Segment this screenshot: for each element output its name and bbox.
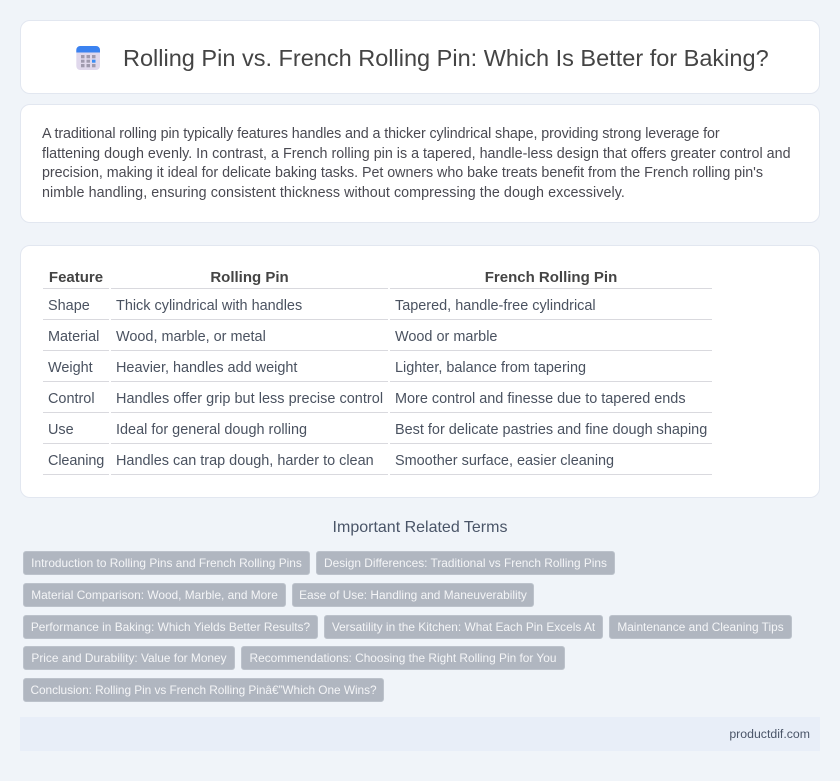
row: material <box>48 329 497 345</box>
table header <box>49 269 617 286</box>
table header: French Rolling Pin <box>485 269 617 286</box>
row: shape: Thick cylindrical with handles <box>116 298 302 314</box>
panel: introduction <box>20 104 820 223</box>
row: control: Handles offer grip but less precise control <box>116 391 383 407</box>
row: material: Wood or marble <box>395 329 497 345</box>
row: use: Best for delicate pastries and fine dough shaping <box>395 422 707 438</box>
related term tags: Recommendations: Choosing the Right Rolling Pin for You <box>250 651 556 665</box>
related term tags: Ease of Use: Handling and Maneuverability <box>299 588 527 602</box>
row: cleaning: Smoother surface, easier cleaning <box>395 453 614 469</box>
related term tags: Maintenance and Cleaning Tips <box>617 620 784 634</box>
row: use <box>48 422 707 438</box>
table header: Feature <box>49 269 103 286</box>
row: weight <box>48 360 586 376</box>
intro text: precision, making it ideal for delicate baking tasks. Pet owners who bake treats benefit from the French rolling pin's <box>42 165 763 181</box>
row: control: More control and finesse due to tapered ends <box>395 391 686 407</box>
related term tags <box>23 551 792 702</box>
row: weight: Lighter, balance from tapering <box>395 360 586 376</box>
footer source link: productdif.com <box>729 727 810 741</box>
intro text <box>42 126 791 201</box>
related term tags: Conclusion: Rolling Pin vs French Rolling Pinâ€”Which One Wins? <box>30 683 377 697</box>
row: control <box>48 391 686 407</box>
row: shape: Tapered, handle-free cylindrical <box>395 298 596 314</box>
row: material: Wood, marble, or metal <box>116 329 266 345</box>
row: cleaning: Cleaning <box>48 453 104 469</box>
row: weight: Weight <box>48 360 93 376</box>
intro text: flattening dough evenly. In contrast, a French rolling pin is a tapered, handle-less design that offers greater control and <box>42 146 791 162</box>
related term tags: Price and Durability: Value for Money <box>31 651 227 665</box>
row: control: Control <box>48 391 95 407</box>
row: cleaning: Handles can trap dough, harder to clean <box>116 453 374 469</box>
related term tags: Design Differences: Traditional vs French Rolling Pins <box>324 556 607 570</box>
intro text: A traditional rolling pin typically features handles and a thicker cylindrical shape, providing strong leverage for <box>42 126 720 142</box>
related term tags: Material Comparison: Wood, Marble, and More <box>31 588 278 602</box>
related term tags: Performance in Baking: Which Yields Better Results? <box>31 620 310 634</box>
table header: Rolling Pin <box>210 269 289 286</box>
row: shape <box>48 298 596 314</box>
panel: comparison table <box>20 245 820 498</box>
related term tags: Versatility in the Kitchen: What Each Pin Excels At <box>332 620 595 634</box>
heading: related terms: Important Related Terms <box>333 519 507 536</box>
row: material: Material <box>48 329 99 345</box>
icon: calendar <box>76 46 100 70</box>
row: weight: Heavier, handles add weight <box>116 360 297 376</box>
footer <box>20 717 820 751</box>
row: shape: Shape <box>48 298 90 314</box>
row: use: Ideal for general dough rolling <box>116 422 307 438</box>
row: cleaning <box>48 453 614 469</box>
panel: header <box>20 20 820 94</box>
intro text: nimble handling, ensuring consistent thickness without compressing the dough excessively. <box>42 185 625 201</box>
related term tags: Introduction to Rolling Pins and French Rolling Pins <box>31 556 302 570</box>
row: use: Use <box>48 422 74 438</box>
title: Rolling Pin vs. French Rolling Pin: Which Is Better for Baking? <box>123 45 769 71</box>
